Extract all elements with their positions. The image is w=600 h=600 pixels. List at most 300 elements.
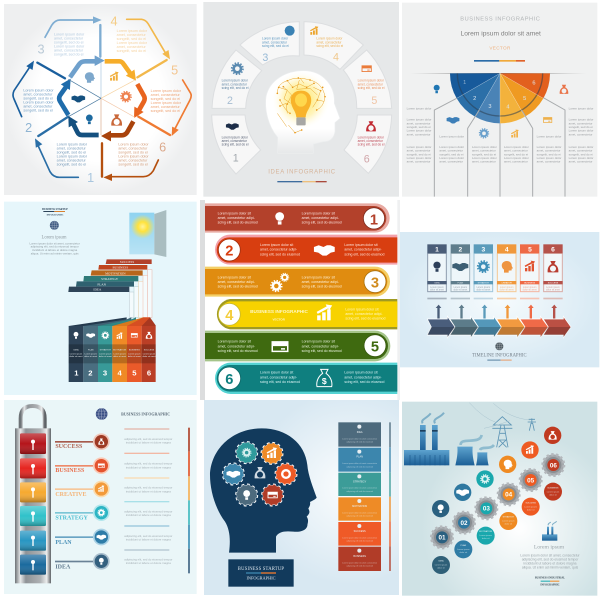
inner arrow heads: [61, 55, 144, 141]
icons: head, chart, gear, bag, bulb, handshake: [72, 72, 131, 126]
ribbon 6: [215, 363, 397, 394]
title: IDEA INFOGRAPHIC: [268, 170, 336, 176]
column labels: Lorem ipsum: [113, 352, 126, 355]
ribbon 3: Lorem ipsum dolor sit: [218, 275, 251, 279]
icons: [226, 26, 376, 131]
footer title: INFOGRAPHIC: [540, 584, 560, 587]
text blocks: Lorem ipsum dolor: [57, 155, 88, 159]
column numbers: 1: [74, 369, 79, 378]
ribbon 2: amet, consectetur adipi-: [260, 248, 297, 252]
factory: [404, 413, 449, 465]
panel: timeline infographic: [400, 232, 599, 367]
ribbon 3: amet, consectetur adipi-: [218, 280, 255, 284]
text block: Lorem ipsum dolor sit amet, consectetur: [520, 553, 580, 557]
column 2: dolor sit amet: [453, 289, 468, 292]
stair labels: SUCCESS: [120, 260, 134, 264]
chevron timeline: [427, 316, 571, 338]
column 4: 4: [505, 247, 509, 254]
wedge numbers: [463, 80, 536, 110]
ribbon 3: scing elit, sed do eiusmod: [302, 285, 342, 289]
text block: adipiscing elit, sed do eiusmod tempor: [522, 557, 579, 561]
column text: Lorem ipsum dolor: [407, 145, 431, 149]
text block: [520, 545, 580, 569]
numbers: 4: [333, 52, 339, 64]
ribbon 6: scing elit, sed do eiusmod: [260, 380, 300, 384]
numbers 1-6: 3: [37, 43, 45, 57]
stairs: [68, 259, 152, 292]
text blocks: songelit, sed do ei: [118, 151, 148, 155]
icon: small factory: [542, 521, 557, 541]
text blocks: amet, consectetur: [23, 105, 53, 109]
column 4: dolor sit amet: [500, 289, 514, 292]
circle icons: [97, 439, 106, 565]
ribbon 2: amet, consectetur adipi-: [344, 248, 382, 252]
card contents: Lorem ipsum dolor sit amet consectetur: [342, 561, 377, 564]
column labels: SUCCESS: [144, 350, 155, 352]
numbered gears: [431, 454, 564, 548]
title: TIMELINE INFOGRAPHIC: [472, 353, 527, 358]
right colour bar: [188, 428, 190, 573]
card contents: SUCCESS: [354, 530, 366, 533]
text blocks: songelit, sed do ei: [151, 97, 180, 101]
ribbon 1: [205, 203, 390, 233]
column labels: dolor sit amet: [70, 355, 83, 358]
icon: globe: [50, 221, 59, 230]
text circles: Lorem ipsum: [502, 520, 515, 523]
column text: amet, consectetur: [407, 160, 430, 164]
segment text: scing elit, sed do ei: [358, 86, 385, 90]
column 1: [427, 244, 447, 299]
segment text: amet, consectetur: [222, 82, 247, 86]
text circles: dolor sit: [482, 537, 490, 540]
column text: Lorem ipsum dolor: [537, 145, 561, 149]
ribbon 4: scing elit, sed do eiusmod: [345, 317, 385, 321]
text blocks: Lorem ipsum dolor: [54, 32, 85, 36]
segment text: amet, consectetur: [316, 40, 341, 44]
ribbon 5: scing elit, sed do eiusmod: [302, 349, 342, 353]
column text: Lorem ipsum dolor: [504, 145, 529, 149]
half circle wedges: [450, 73, 550, 123]
column labels: dolor sit amet: [84, 355, 98, 358]
text blocks: songelit, sed do ei: [54, 52, 84, 56]
stacked cards: [338, 422, 381, 571]
column 1: 1: [435, 247, 439, 254]
column labels: dolor sit amet: [113, 355, 127, 358]
text circles: dolor sit: [527, 508, 535, 511]
text blocks: amet, consectetur: [54, 36, 84, 40]
numbers: 5: [371, 95, 377, 107]
column 5: BUSINESS: [524, 283, 536, 285]
column text: Lorem ipsum dolor: [472, 156, 497, 160]
column text: Lorem ipsum dolor: [407, 129, 431, 133]
numbers: 1: [233, 153, 239, 165]
text block: [30, 235, 80, 255]
numbers 1-6: [25, 15, 178, 185]
column text: songelit, sed do ei: [472, 152, 496, 156]
card contents: adipiscing elit sed do eiusmod: [346, 441, 373, 444]
text blocks: songelit, sed do ei: [23, 109, 53, 113]
text circles: BUSINESS: [548, 487, 559, 489]
heading: INFOGRAPHIC: [47, 213, 64, 216]
gears: [223, 443, 296, 505]
column text: amet, consectetur: [504, 160, 528, 164]
right text: incididunt ut labore et dolore magna: [126, 465, 171, 469]
column 3: 3: [481, 247, 485, 254]
column 2: [451, 244, 470, 299]
column 6: 6: [551, 247, 555, 254]
numbers: 3: [262, 52, 268, 64]
column text: Lorem ipsum dolor: [439, 134, 464, 138]
right text: adipiscing elit, sed do eiusmod tempor: [124, 462, 172, 466]
segment text: scing elit, sed do ei: [262, 44, 289, 48]
column 2: 2: [458, 247, 462, 254]
column 5: dolor sit amet: [523, 289, 537, 292]
column 3: STRATEGY: [478, 282, 490, 285]
text block: incididunt ut labore et dolore magna: [524, 561, 577, 565]
segment text: amet, consectetur: [262, 40, 287, 44]
ribbon 2: [215, 235, 397, 265]
heading: Lorem ipsum dolor sit amet: [461, 31, 541, 38]
right text: incididunt ut labore et dolore magna: [126, 538, 171, 542]
panel: industrial gears: [402, 402, 597, 596]
ribbon 2: 2: [225, 244, 233, 260]
text circles: dolor sit: [549, 493, 557, 496]
column text: Lorem ipsum dolor: [407, 118, 431, 122]
column 2: Lorem ipsum: [454, 286, 467, 289]
ribbon 2: Lorem ipsum dolor sit: [260, 243, 293, 247]
top shadow line: [410, 72, 587, 75]
right text: adipiscing elit, sed do eiusmod tempor: [124, 437, 172, 441]
ribbon 4: Lorem ipsum dolor sit: [345, 307, 379, 311]
ribbon 6: amet, consectetur adipi-: [344, 375, 382, 379]
numbers: 2: [227, 95, 233, 107]
keyholes: [31, 440, 35, 570]
column 3: [474, 244, 493, 299]
ribbon 6: amet, consectetur adipi-: [260, 375, 297, 379]
text block: Lorem ipsum: [534, 545, 565, 551]
head silhouette: [210, 428, 317, 553]
text blocks: amet, consectetur: [117, 33, 147, 37]
ribbon 1: scing elit, sed do eiusmod: [302, 221, 342, 225]
column 6: Lorem ipsum: [546, 286, 560, 289]
ribbon 1: 1: [370, 212, 378, 228]
column 5: 5: [528, 247, 532, 254]
card contents: adipiscing elit sed do eiusmod: [346, 490, 373, 493]
text circles: [432, 483, 562, 574]
column text: Lorem ipsum dolor: [537, 156, 561, 160]
caption box: INFOGRAPHIC: [246, 575, 276, 580]
right text: adipiscing elit, sed do eiusmod tempor: [124, 534, 172, 538]
card contents: IDEA: [357, 431, 363, 434]
outer arrow heads: [26, 16, 179, 181]
text block: aliqua. Ut enim ad minim veniam, quis: [522, 565, 578, 569]
column numbers: 3: [103, 369, 107, 378]
label lines and circles: [55, 433, 110, 570]
column text: amet, consectetur: [439, 149, 463, 153]
ribbon 6: Lorem ipsum dolor sit: [260, 371, 293, 375]
lock tiles: [20, 433, 46, 575]
column icons: [74, 332, 152, 339]
footer title: [535, 577, 565, 587]
ribbon 2: scing elit, sed do eiusmod: [344, 252, 384, 256]
column labels: dolor sit amet: [99, 355, 112, 358]
numbered gears: 01: [438, 535, 446, 542]
stair support lines: [129, 270, 152, 317]
segment text: Lorem ipsum dolor: [222, 79, 248, 83]
text blocks: amet, consectetur: [57, 147, 87, 151]
footer title: BUSINESS INDUSTRIAL: [535, 577, 565, 580]
column labels: STRATEGY: [100, 349, 112, 352]
right text: adipiscing elit, sed do eiusmod tempor: [124, 557, 172, 561]
text block: Lorem ipsum: [42, 235, 67, 240]
segment text: amet, consectetur: [358, 82, 383, 86]
column text: amet, consectetur: [569, 121, 592, 125]
icons: [434, 85, 568, 138]
text blocks: amet, consectetur: [54, 48, 84, 52]
column 6: [543, 244, 563, 299]
wedge numbers: 2: [473, 96, 476, 102]
card contents: Lorem ipsum dolor sit amet consectetur: [342, 511, 377, 514]
wedge numbers: 3: [488, 104, 492, 110]
text block: Lorem ipsum dolor sit amet, consectetur: [30, 241, 80, 245]
ribbon 1: amet, consectetur adipi-: [218, 216, 255, 220]
card contents: [342, 425, 377, 568]
right text: incididunt ut labore et dolore magna: [126, 513, 171, 517]
text blocks: songelit, sed do ei: [151, 109, 180, 113]
centre spokes: [68, 62, 135, 135]
wedge numbers: 5: [523, 96, 526, 102]
card contents: STRATEGY: [353, 480, 367, 483]
stair labels: MOTIVATION: [105, 271, 126, 275]
right text: incididunt ut labore et dolore magna: [126, 441, 171, 445]
ribbon 6: scing elit, sed do eiusmod: [344, 380, 384, 384]
numbers: 6: [364, 153, 370, 165]
icon: globe: [495, 342, 503, 350]
text blocks: Lorem ipsum dolor: [151, 101, 182, 105]
column labels: [70, 349, 156, 358]
column block: [69, 317, 156, 382]
stair labels: [93, 260, 134, 292]
column text: Lorem ipsum dolor: [439, 156, 464, 160]
card contents: PLAN: [356, 456, 363, 459]
text blocks: amet, consectetur: [118, 159, 148, 163]
column text: amet, consectetur: [569, 160, 592, 164]
column 2: PLAN: [458, 282, 464, 285]
column labels: dolor sit amet: [128, 355, 141, 358]
column text: amet, consectetur: [569, 132, 592, 136]
panel: hexagon arrows cycle: [4, 4, 197, 195]
text blocks: Lorem ipsum dolor: [151, 89, 182, 93]
panel: business infographic half circle: [402, 3, 597, 197]
column text: Lorem ipsum dolor: [537, 134, 561, 138]
labels: [55, 444, 88, 570]
column 6: SUCCESS: [548, 283, 559, 285]
column 6: dolor sit amet: [546, 289, 560, 292]
column text: songelit, sed do ei: [504, 152, 528, 156]
card contents: Lorem ipsum dolor sit amet consectetur: [342, 462, 377, 465]
panel: stairs to door: [4, 202, 197, 395]
ribbon 1: scing elit, sed do eiusmod: [218, 221, 258, 225]
numbered gears: 02: [460, 520, 468, 527]
column text: Lorem ipsum dolor: [407, 156, 431, 160]
column labels: MOTIVATION: [113, 349, 127, 352]
column text: amet, consectetur: [504, 149, 528, 153]
text blocks: amet, consectetur: [151, 93, 181, 97]
labels: SUCCESS: [55, 444, 83, 450]
ribbon 3: 3: [371, 275, 379, 291]
column text: amet, consectetur: [407, 149, 430, 153]
stair labels: IDEA: [93, 288, 102, 292]
padlock body: [15, 428, 51, 583]
ribbon 1: Lorem ipsum dolor sit: [218, 211, 251, 215]
right text: incididunt ut labore et dolore magna: [126, 489, 171, 493]
column numbers: 2: [88, 369, 92, 378]
column text: Lorem ipsum dolor: [569, 129, 593, 133]
segment text: scing elit, sed do ei: [316, 44, 343, 48]
text blocks: [23, 29, 182, 167]
column text: Lorem ipsum dolor: [569, 156, 593, 160]
caption box: [228, 559, 294, 587]
column text: Lorem ipsum dolor: [407, 106, 431, 110]
text blocks: Lorem ipsum dolor: [23, 89, 54, 93]
right text: [124, 437, 172, 565]
numbered gears: 05: [527, 477, 535, 484]
heading: VECTOR: [489, 46, 511, 51]
text blocks: songelit, sed do ei: [117, 37, 146, 41]
column text: amet, consectetur: [472, 160, 496, 164]
segment text: scing elit, sed do ei: [222, 143, 249, 147]
column labels: BUSINESS: [129, 350, 140, 352]
column text: songelit, sed do ei: [537, 152, 561, 156]
title: BUSINESS INFOGRAPHIC: [121, 412, 170, 417]
ribbon 5: Lorem ipsum dolor sit: [302, 340, 335, 344]
right colour bar: [389, 422, 391, 571]
ribbon 5: amet, consectetur adipi-: [218, 344, 255, 348]
heading: BUSINESS STARTUP: [42, 208, 68, 211]
text blocks: Lorem ipsum dolor: [57, 143, 88, 147]
text blocks: Lorem ipsum dolor: [118, 143, 149, 147]
padlock shackle: [21, 406, 45, 429]
column labels: Lorem ipsum: [143, 352, 155, 355]
segment text: Lorem ipsum dolor: [358, 79, 384, 83]
labels: IDEA: [55, 564, 71, 570]
labels: CREATIVE: [55, 492, 86, 498]
column labels: IDEA: [73, 349, 79, 352]
ribbon 1: amet, consectetur adipi-: [302, 216, 339, 220]
cooling towers: [455, 435, 494, 465]
numbered gears: 04: [505, 492, 513, 499]
column numbers: 4: [118, 369, 123, 378]
ribbon 2: scing elit, sed do eiusmod: [260, 252, 300, 256]
card contents: adipiscing elit sed do eiusmod: [346, 465, 373, 468]
icon circles: [432, 427, 561, 517]
panel: head with gears: [204, 400, 399, 595]
caption box: BUSINESS STARTUP: [238, 567, 284, 572]
text circles: dolor sit: [437, 566, 445, 569]
ribbon 6: $: [322, 376, 327, 386]
outer arrows and spokes: [13, 19, 191, 177]
title rule: [487, 359, 512, 361]
column numbers: 6: [147, 369, 151, 378]
ribbon 5: amet, consectetur adipi-: [302, 344, 339, 348]
column text: Lorem ipsum dolor: [504, 156, 529, 160]
text blocks: amet, consectetur: [23, 93, 53, 97]
column text: amet, consectetur: [537, 160, 560, 164]
column labels: Lorem ipsum: [84, 352, 97, 355]
column text: songelit, sed do ei: [569, 125, 593, 129]
power pylons: [469, 403, 536, 447]
ribbon 5: scing elit, sed do eiusmod: [218, 349, 258, 353]
text blocks: songelit, sed do ei: [23, 97, 53, 101]
ribbon 3: [205, 267, 390, 297]
column text: Lorem ipsum dolor: [569, 106, 593, 110]
segment text: scing elit, sed do ei: [222, 86, 249, 90]
card contents: MOTIVATION: [352, 505, 367, 508]
column text: Lorem ipsum dolor: [569, 145, 593, 149]
numbers 1-6: 5: [171, 64, 178, 78]
right text: adipiscing elit, sed do eiusmod tempor: [124, 509, 172, 513]
right text: adipiscing elit, sed do eiusmod tempor: [124, 486, 172, 490]
segment text: Lorem ipsum dolor: [316, 37, 342, 41]
segment text: Lorem ipsum dolor: [358, 135, 384, 139]
segment text: amet, consectetur: [222, 139, 247, 143]
text blocks: amet, consectetur: [118, 147, 148, 151]
column text: amet, consectetur: [439, 160, 463, 164]
text circles: Lorem ipsum: [479, 534, 492, 537]
icon: globe: [96, 408, 108, 420]
heading: [460, 16, 541, 51]
ribbon 6: Lorem ipsum dolor sit: [344, 371, 378, 375]
text blocks: amet, consectetur: [57, 159, 87, 163]
column 1: IDEA: [434, 282, 440, 285]
text blocks: Lorem ipsum dolor: [117, 29, 148, 33]
card contents: adipiscing elit sed do eiusmod: [346, 515, 373, 518]
column numbers: 5: [132, 369, 137, 378]
stair labels: STRATEGY: [101, 277, 119, 281]
labels: BUSINESS: [55, 468, 85, 474]
text blocks: Lorem ipsum dolor: [118, 155, 149, 159]
numbers 1-6: 6: [159, 140, 166, 154]
card contents: adipiscing elit sed do eiusmod: [346, 540, 373, 543]
lightbulb with glow and brain network: [272, 71, 330, 133]
column text: amet, consectetur: [569, 149, 592, 153]
column 1: dolor sit amet: [430, 289, 444, 292]
segment text: amet, consectetur: [358, 139, 383, 143]
text circles: IDEA: [438, 559, 444, 562]
stair labels: BUSINESS: [112, 266, 128, 270]
ribbon 3: scing elit, sed do eiusmod: [218, 285, 258, 289]
text blocks: songelit, sed do ei: [54, 40, 84, 44]
column labels: dolor sit amet: [143, 355, 156, 358]
column 4: CREATIVE: [501, 282, 513, 285]
column 1: Lorem ipsum: [430, 286, 444, 289]
card contents: Lorem ipsum dolor sit amet consectetur: [342, 487, 377, 490]
numbers: [227, 52, 377, 165]
panel: idea infographic: [203, 2, 399, 197]
numbers 1-6: 1: [87, 171, 94, 185]
up arrows: [436, 305, 557, 319]
ribbon 3: Lorem ipsum dolor sit: [302, 275, 335, 279]
column 3: Lorem ipsum: [477, 286, 490, 289]
column text: Lorem ipsum dolor: [439, 145, 464, 149]
numbered gears: 06: [550, 462, 557, 469]
column text: amet, consectetur: [407, 121, 430, 125]
column numbers: [74, 369, 151, 378]
labels: PLAN: [55, 540, 72, 546]
labels: STRATEGY: [55, 516, 88, 522]
text circles: Lorem ipsum: [435, 563, 447, 566]
column labels: Lorem ipsum: [99, 352, 112, 355]
